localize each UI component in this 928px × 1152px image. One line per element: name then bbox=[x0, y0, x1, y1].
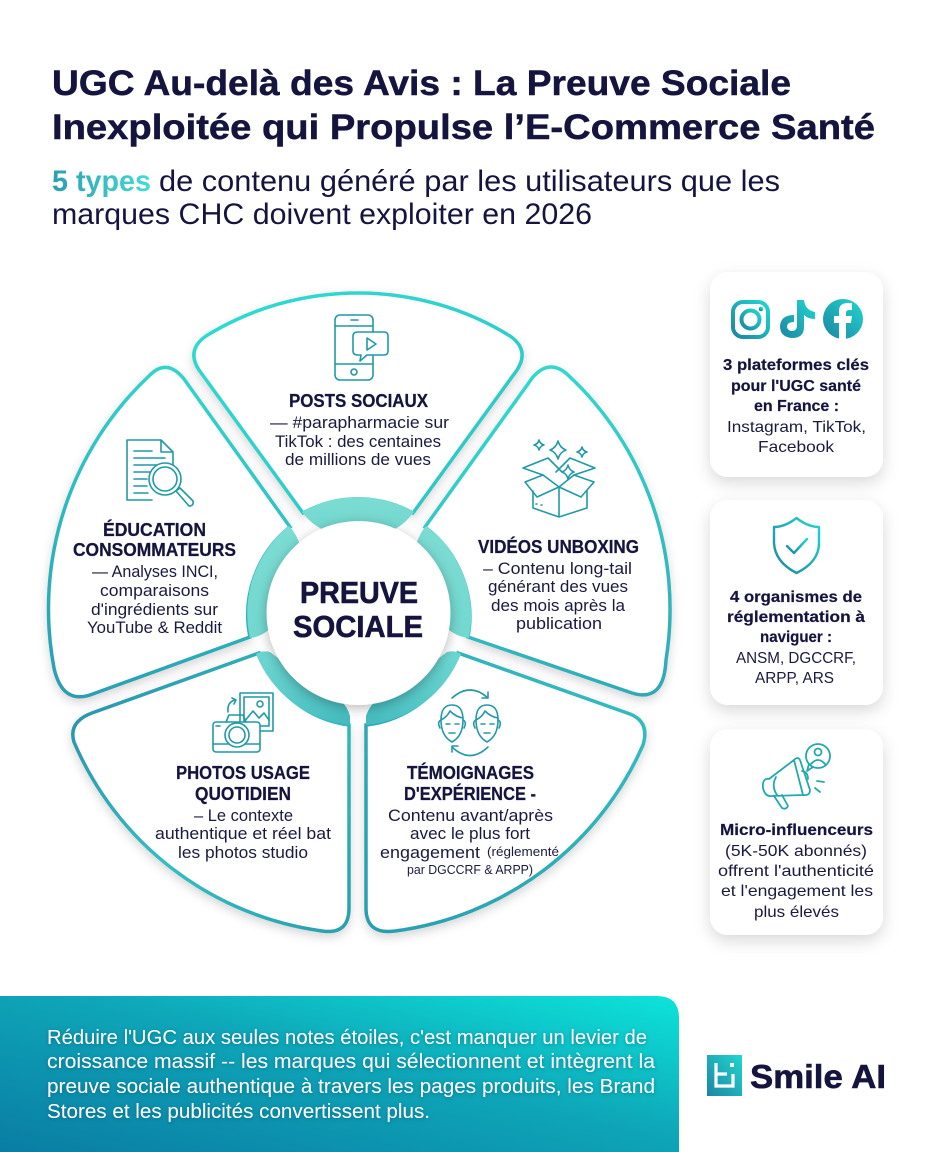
text: témoignages d'expérience: D'EXPÉRIENCE - bbox=[404, 783, 536, 804]
text: réglementation: 4 organismes de bbox=[730, 589, 862, 606]
text: témoignages d'expérience: par DGCCRF & ARPP) bbox=[407, 863, 533, 877]
text: témoignages d'expérience: engagement bbox=[380, 844, 480, 862]
icon: facebook bbox=[823, 299, 863, 339]
text: éducation consommateurs bbox=[73, 519, 236, 637]
panel: éducation consommateurs bbox=[48, 367, 302, 697]
text: plateformes: pour l'UGC santé bbox=[731, 378, 861, 395]
text: vidéos unboxing: publication bbox=[516, 615, 602, 633]
subtitle bbox=[52, 165, 780, 231]
card: réglementation bbox=[710, 500, 883, 705]
panel: vidéos unboxing bbox=[414, 367, 670, 695]
text: photos usage quotidien: QUOTIDIEN bbox=[195, 784, 291, 804]
subtitle: 5 types bbox=[52, 165, 151, 198]
footer text bbox=[47, 1027, 656, 1123]
text: photos usage quotidien: les photos studio bbox=[178, 844, 308, 862]
icon: document with magnifier bbox=[127, 440, 193, 506]
footer text: croissance massif -- les marques qui sélectionnent et intègrent la bbox=[47, 1051, 656, 1073]
footer text: Stores et les publicités convertissent plus. bbox=[47, 1101, 430, 1123]
centre circle: preuve sociale: SOCIALE bbox=[293, 609, 423, 644]
text: plateformes: en France : bbox=[754, 398, 839, 415]
text: vidéos unboxing bbox=[478, 536, 639, 633]
text: photos usage quotidien: authentique et réel bat bbox=[155, 825, 331, 843]
text: réglementation: ANSM, DGCCRF, bbox=[736, 650, 856, 667]
subtitle: de contenu généré par les utilisateurs que les bbox=[159, 165, 780, 198]
footer banner bbox=[0, 996, 679, 1152]
text: plateformes: Instagram, TikTok, bbox=[727, 419, 866, 436]
text: plateformes: Facebook bbox=[758, 439, 835, 456]
text: réglementation bbox=[727, 589, 865, 687]
icon: camera and photo bbox=[213, 693, 273, 752]
text: vidéos unboxing: des mois après la bbox=[491, 597, 626, 615]
panel: photos usage quotidien bbox=[73, 651, 350, 932]
text: témoignages d'expérience bbox=[380, 762, 559, 877]
text: vidéos unboxing: générant des vues bbox=[488, 578, 628, 596]
text: éducation consommateurs: d'ingrédients sur bbox=[91, 601, 219, 619]
icon: open box with sparkles bbox=[523, 440, 595, 517]
text: posts sociaux: POSTS SOCIAUX bbox=[289, 391, 428, 411]
text: éducation consommateurs: comparaisons bbox=[100, 582, 209, 600]
text: micro-influenceurs bbox=[718, 822, 874, 921]
icon: tiktok bbox=[780, 300, 815, 338]
title: UGC Au-delà des Avis : La Preuve Sociale bbox=[52, 64, 791, 103]
logo: Smile AI: Smile AI bbox=[750, 1058, 886, 1095]
text: témoignages d'expérience: Contenu avant/après bbox=[388, 807, 553, 825]
icon: megaphone with user bubble bbox=[763, 744, 830, 809]
title bbox=[52, 64, 875, 147]
icon: shield with check bbox=[774, 518, 819, 573]
text: photos usage quotidien: – Le contexte bbox=[194, 807, 293, 825]
text: éducation consommateurs: CONSOMMATEURS bbox=[73, 540, 236, 560]
text: posts sociaux: TikTok : des centaines bbox=[275, 433, 441, 451]
icon: two faces with swap arrows bbox=[439, 690, 500, 756]
text: micro-influenceurs: Micro-influenceurs bbox=[720, 822, 873, 839]
text: micro-influenceurs: et l'engagement les bbox=[721, 883, 873, 900]
text: témoignages d'expérience: TÉMOIGNAGES bbox=[407, 762, 534, 783]
footer text: preuve sociale authentique à travers les pages produits, les Brand bbox=[47, 1076, 655, 1098]
text: réglementation: ARPP, ARS bbox=[755, 670, 834, 687]
text: vidéos unboxing: VIDÉOS UNBOXING bbox=[478, 536, 639, 557]
text: plateformes: 3 plateformes clés bbox=[723, 357, 869, 374]
text: photos usage quotidien bbox=[155, 763, 331, 862]
text: photos usage quotidien: PHOTOS USAGE bbox=[176, 763, 310, 783]
footer text: Réduire l'UGC aux seules notes étoiles, c'est manquer un levier de bbox=[47, 1027, 647, 1049]
icon: instagram bbox=[733, 302, 768, 337]
panel: posts sociaux bbox=[194, 293, 522, 530]
text: éducation consommateurs: YouTube & Reddit bbox=[87, 619, 222, 637]
text: vidéos unboxing: – Contenu long-tail bbox=[483, 560, 632, 578]
text: témoignages d'expérience: avec le plus fort bbox=[410, 825, 530, 843]
text: témoignages d'expérience: (réglementé bbox=[487, 845, 559, 859]
text: réglementation: naviguer : bbox=[760, 629, 832, 646]
text: éducation consommateurs: ÉDUCATION bbox=[103, 519, 206, 540]
text: éducation consommateurs: — Analyses INCI, bbox=[92, 563, 218, 581]
text: posts sociaux bbox=[270, 391, 450, 469]
text: micro-influenceurs: (5K-50K abonnés) bbox=[725, 843, 867, 860]
card: plateformes bbox=[710, 272, 883, 477]
icon: phone with video bubble bbox=[335, 315, 388, 380]
text: plateformes bbox=[723, 357, 869, 456]
text: posts sociaux: de millions de vues bbox=[285, 451, 431, 469]
centre circle: preuve sociale: PREUVE bbox=[300, 575, 418, 610]
subtitle: marques CHC doivent exploiter en 2026 bbox=[52, 198, 592, 231]
card: micro-influenceurs bbox=[710, 729, 883, 935]
text: posts sociaux: — #parapharmacie sur bbox=[270, 414, 450, 432]
text: micro-influenceurs: offrent l'authenticité bbox=[718, 863, 874, 880]
title: Inexploitée qui Propulse l’E-Commerce Santé bbox=[52, 108, 875, 147]
panel: témoignages d'expérience bbox=[366, 651, 645, 932]
logo: Smile AI bbox=[707, 1055, 886, 1096]
text: réglementation: réglementation à bbox=[727, 609, 865, 626]
centre circle: preuve sociale bbox=[266, 521, 450, 705]
text: micro-influenceurs: plus élevés bbox=[754, 904, 839, 921]
